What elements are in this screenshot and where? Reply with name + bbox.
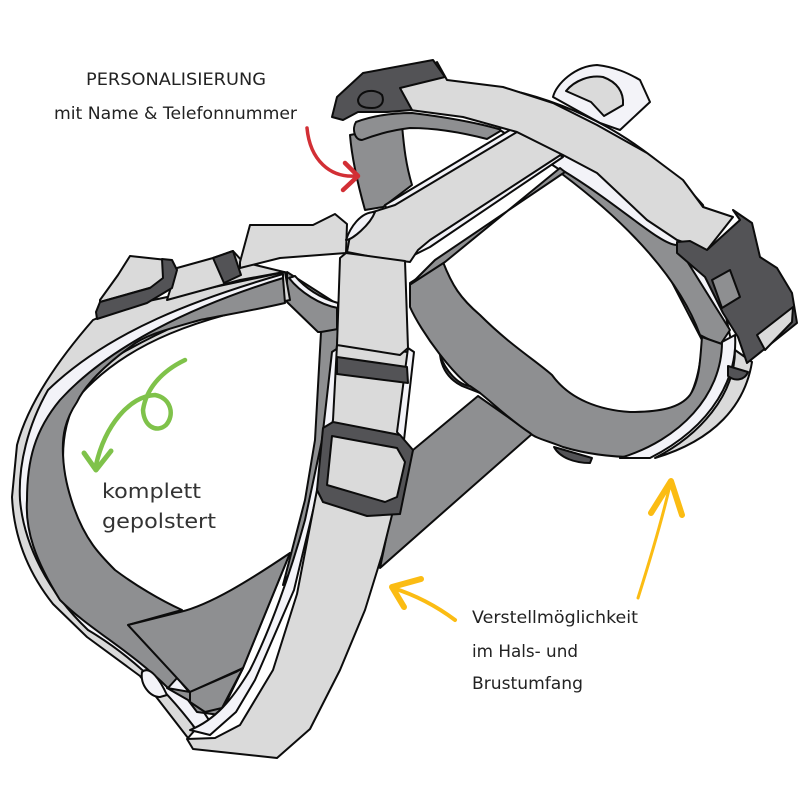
- yellow arrow left: [392, 579, 455, 620]
- left loop white stripe: [20, 274, 283, 730]
- cross strap: [347, 128, 565, 284]
- left loop padding: [27, 278, 290, 700]
- label: verstellmoeglichkeit: im Hals- und: [472, 642, 578, 662]
- adjuster tab: [240, 214, 347, 268]
- label: verstellmoeglichkeit: Brustumfang: [472, 674, 583, 694]
- right loop upper inner padding: [562, 170, 730, 345]
- label: personalisierung: [54, 70, 297, 124]
- right loop rear D-ring: [553, 65, 650, 130]
- dark slider left: [213, 251, 241, 283]
- neck strap rear: [350, 125, 412, 210]
- centre buckle: [317, 422, 413, 516]
- yellow arrow right: [638, 481, 682, 598]
- green arrow: [84, 360, 185, 470]
- top strap: [398, 62, 733, 250]
- right small loop: [728, 366, 748, 379]
- under-strap tabs: [440, 355, 480, 393]
- left handle buckle: [96, 256, 177, 319]
- red arrow: [307, 128, 358, 190]
- label: verstellmoeglichkeit: [472, 608, 638, 694]
- middle dark slider: [337, 357, 408, 383]
- strap to buckle left: [167, 251, 284, 300]
- top dark buckle: [332, 60, 445, 120]
- chest flap: [128, 553, 290, 715]
- label: komplett gepolstert: gepolstert: [102, 509, 216, 533]
- right loop padding: [410, 262, 722, 457]
- white edge strip: [190, 348, 338, 735]
- medium side strip: [283, 329, 338, 585]
- label: personalisierung: PERSONALISIERUNG: [86, 70, 266, 90]
- centre wedge padding: [287, 272, 337, 332]
- label: verstellmoeglichkeit: Verstellmöglichkeit: [472, 608, 638, 628]
- label: komplett gepolstert: komplett: [102, 479, 201, 503]
- back connecting strap: [380, 396, 532, 568]
- lower ring: [142, 670, 167, 697]
- label: personalisierung: mit Name & Telefonnummer: [54, 104, 297, 124]
- left loop outer edge: [12, 272, 290, 738]
- label: komplett gepolstert: [102, 479, 216, 533]
- right dark buckle: [677, 210, 797, 363]
- right loop outer edge: [500, 90, 735, 458]
- upper neck padding band: [354, 113, 502, 140]
- right loop padding stripes: [620, 335, 735, 458]
- centre gray gap: [346, 212, 375, 240]
- strap shoulder piece: [337, 253, 408, 355]
- white right strip: [397, 348, 414, 440]
- main chest strap lower: [187, 345, 408, 758]
